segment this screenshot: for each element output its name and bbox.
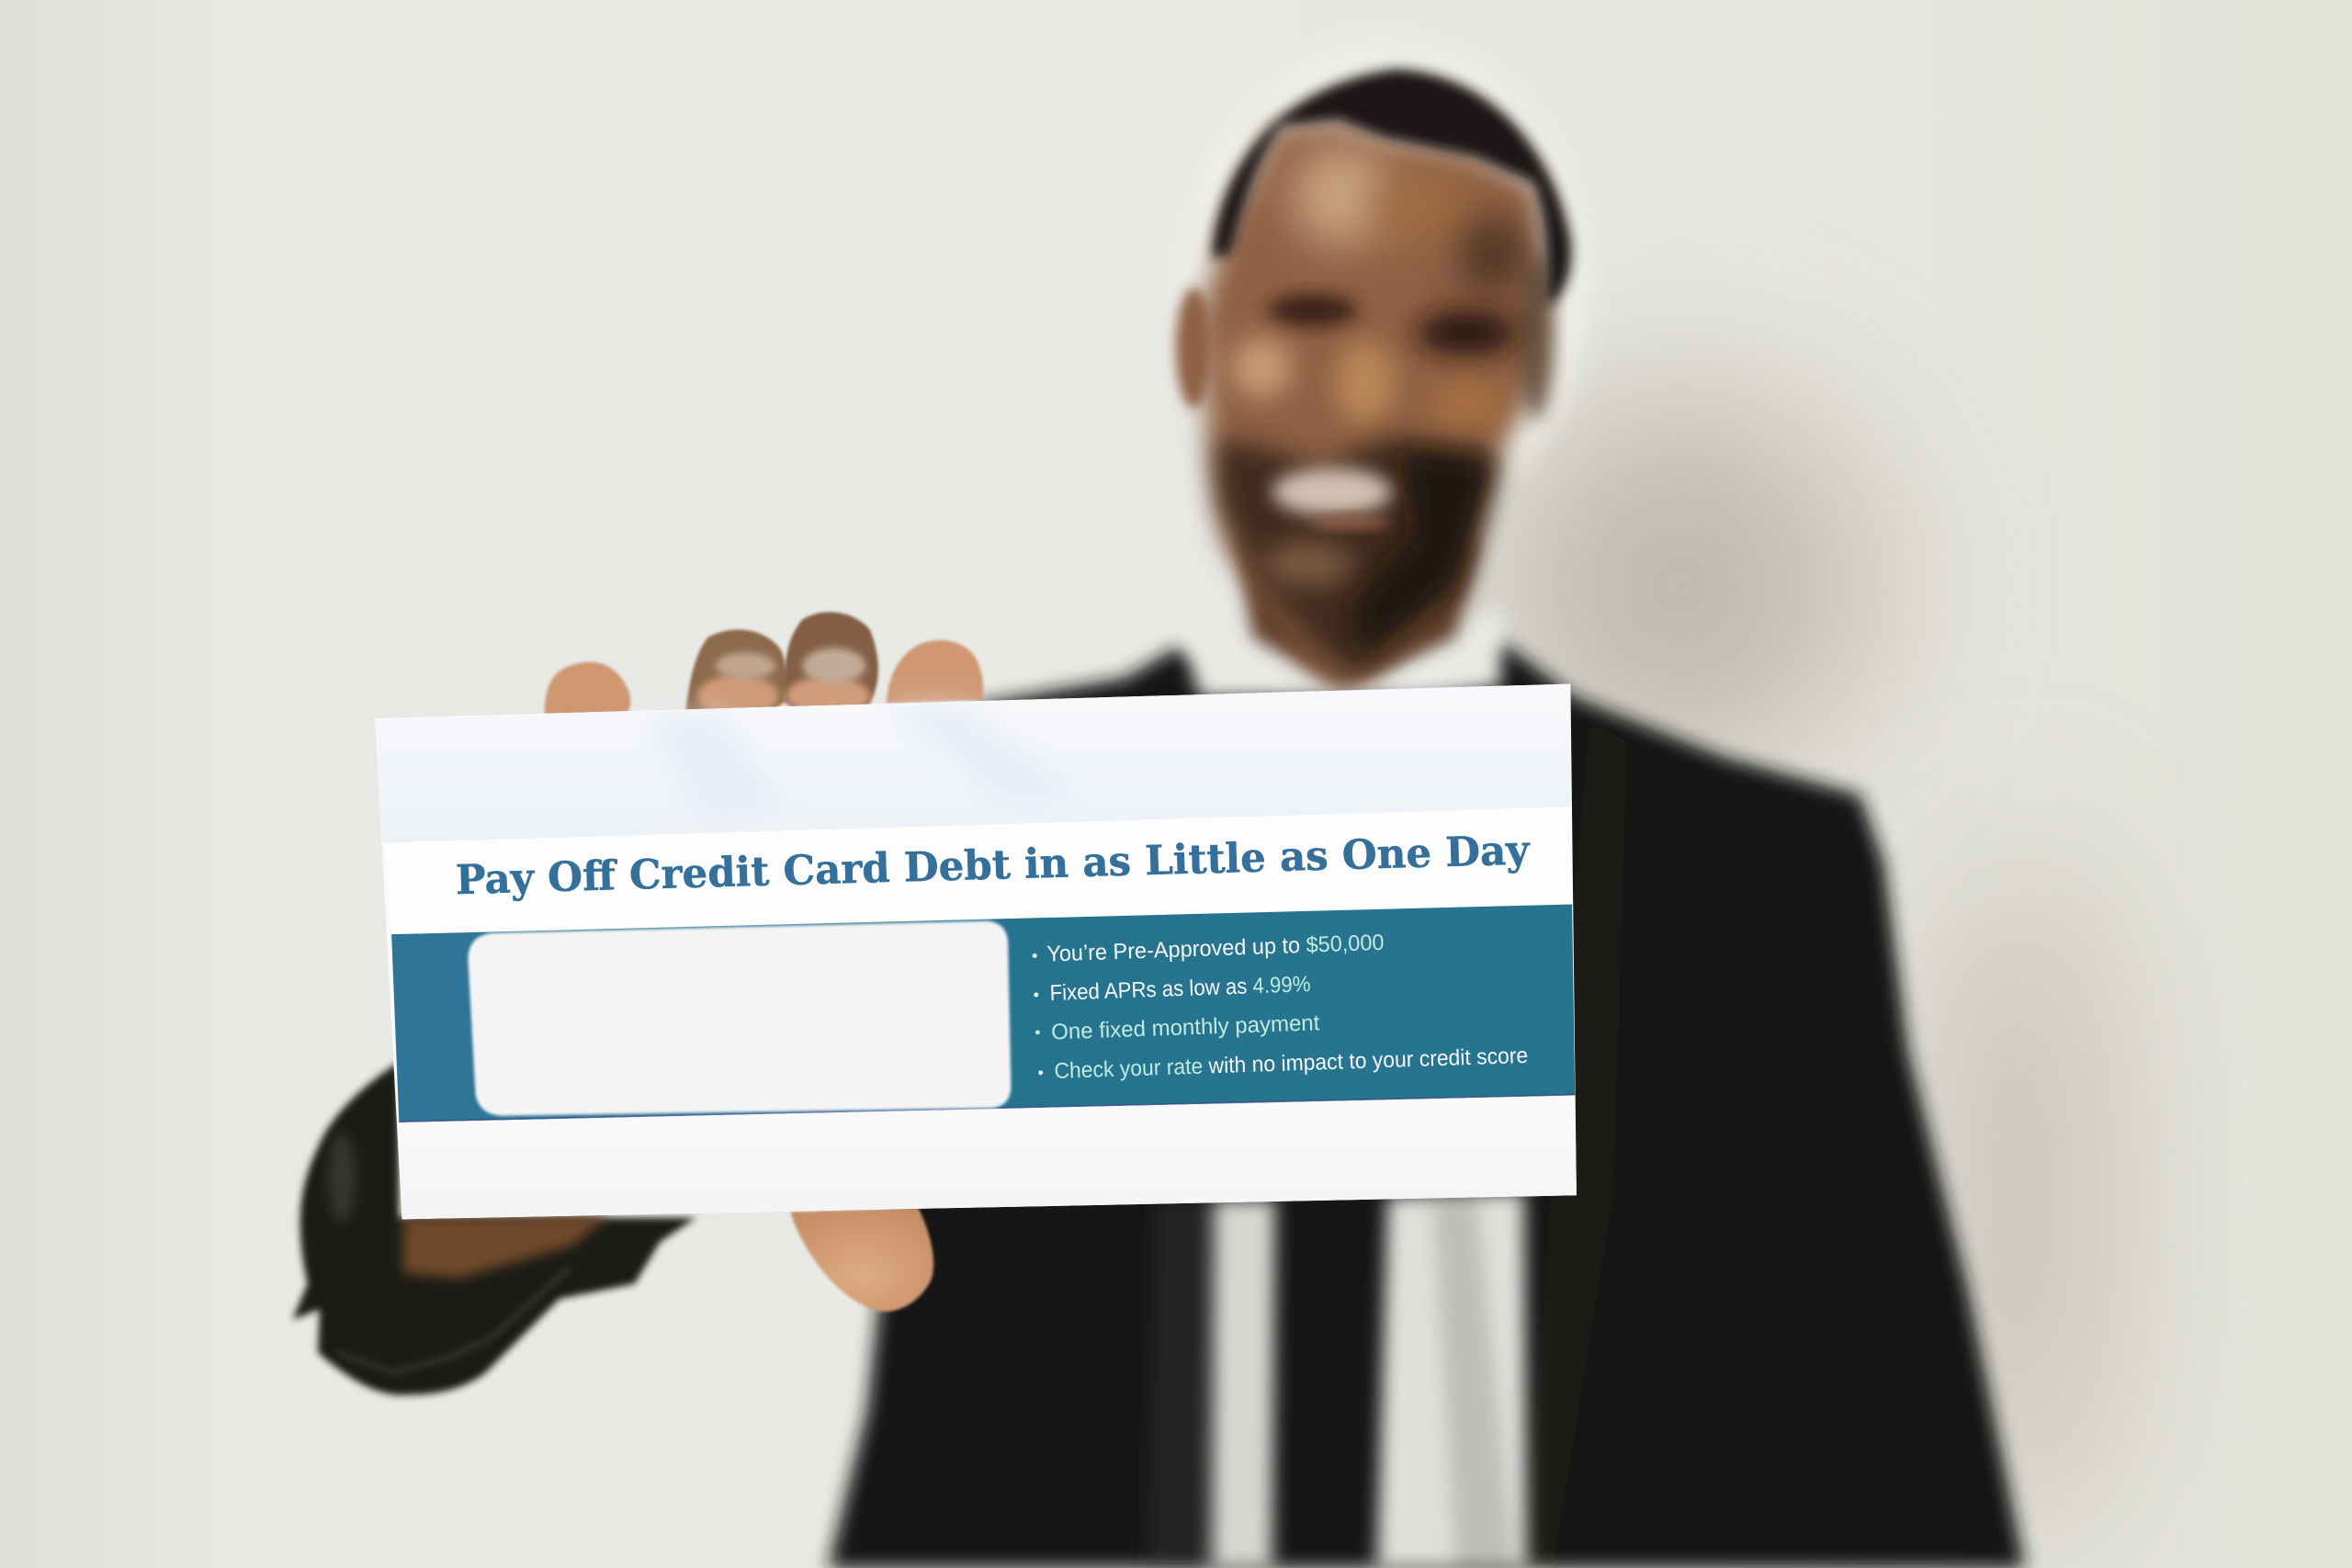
ring finger (685, 629, 787, 721)
bullet list: You’re Pre-Approved up to $50,000 (1046, 931, 1385, 967)
bullet list: One fixed monthly payment (1051, 1010, 1320, 1044)
shirt collar (1173, 607, 1503, 697)
head (1176, 45, 1587, 687)
head halo (1179, 45, 1587, 525)
forehead orange side (1371, 174, 1479, 246)
lower lip (1311, 514, 1389, 529)
bullet list (1032, 931, 1529, 1084)
teal band (391, 905, 1575, 1122)
left cheek highlight (1231, 337, 1292, 398)
shirt and tie (1148, 1192, 1527, 1568)
envelope (375, 684, 1577, 1219)
ears (1176, 288, 1212, 408)
smile (1272, 468, 1392, 516)
beard (1215, 438, 1497, 675)
white headline band (384, 807, 1572, 934)
envelope window (468, 920, 1011, 1116)
nose (1335, 341, 1395, 424)
envelope body (375, 684, 1577, 1219)
bullet 1: • (1032, 946, 1038, 965)
neck (1239, 540, 1477, 687)
teal band bottom rule (399, 1095, 1575, 1122)
headline: Pay Off Credit Card Debt in as Little as One Day (455, 827, 1532, 904)
chin light (1263, 541, 1353, 586)
bullet list: Fixed APRs as low as 4.99% (1049, 972, 1311, 1006)
temple shadow (1460, 216, 1525, 294)
forehead highlight (1292, 144, 1394, 246)
jacket (828, 645, 2025, 1568)
lower panel (399, 1096, 1577, 1219)
flap creases (645, 702, 1080, 818)
right beard dark side (1358, 450, 1492, 660)
bullet 4: • (1037, 1064, 1044, 1082)
right temple (1520, 255, 1553, 420)
bullet list: Check your rate with no impact to your credit score (1054, 1043, 1529, 1084)
sleeve gloss (329, 1133, 356, 1223)
arm and cuff (292, 1062, 696, 1395)
right cheek (1431, 379, 1503, 431)
cuff highlight (337, 1268, 570, 1372)
hair (1212, 69, 1571, 306)
envelope flap (375, 684, 1570, 843)
face (1200, 120, 1546, 681)
hand fingers (545, 612, 983, 721)
left eye (1268, 294, 1358, 327)
little finger (545, 662, 630, 716)
bullet 3: • (1035, 1023, 1041, 1042)
index finger (887, 640, 983, 704)
thumb (790, 1207, 933, 1312)
bullet 2: • (1033, 986, 1039, 1004)
wrist (403, 1214, 610, 1278)
right eye (1416, 310, 1518, 355)
middle finger (785, 612, 878, 719)
sleeve (292, 1062, 696, 1395)
